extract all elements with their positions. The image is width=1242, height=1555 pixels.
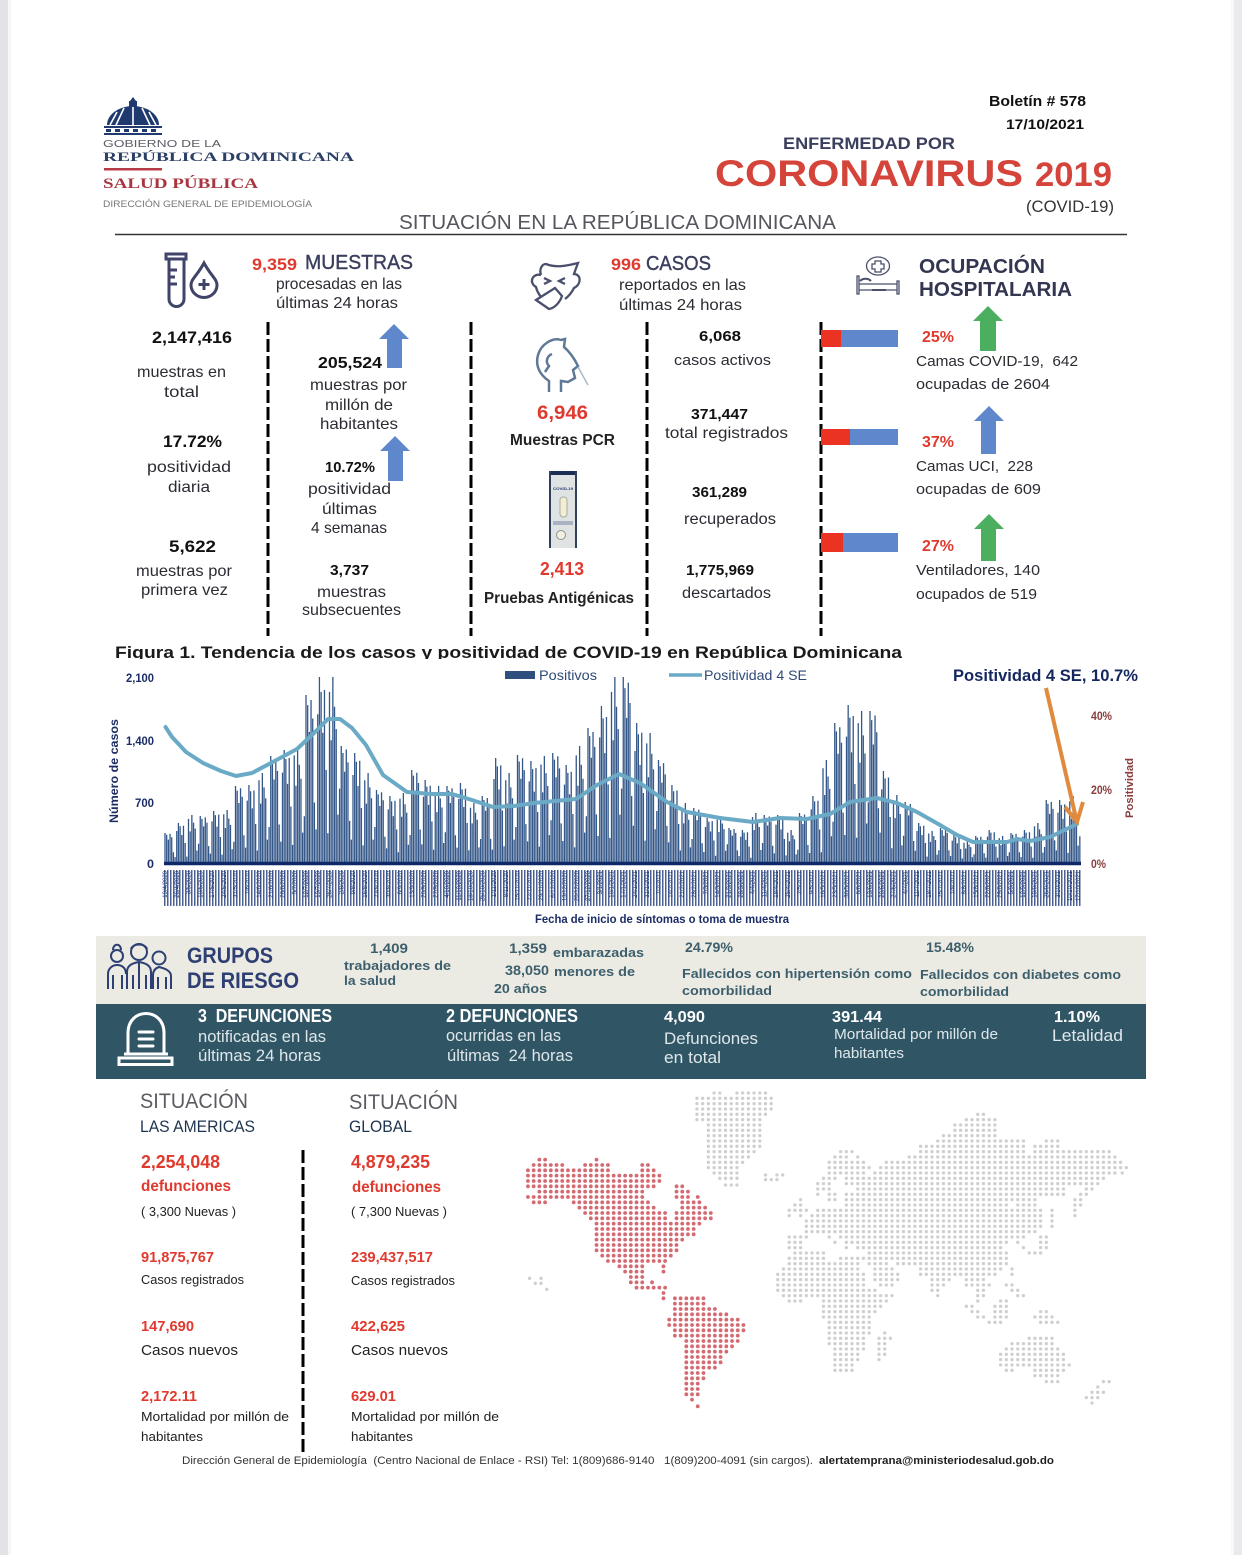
x axis: date labels: 21/3/2021 [727,870,733,898]
heading: 9,359 muestras: procesadas en las [276,276,402,293]
stat: muestras por primera vez: 5,622 [169,537,216,556]
stat: muestras subsecuentes: 3,737 [330,563,369,579]
stat: casos registrados: Casos registrados [141,1272,244,1287]
stat: mortalidad: Mortalidad por millón de [351,1409,499,1424]
heading: 9,359 muestras: MUESTRAS [305,252,413,274]
stat: camas UCI: 37% [922,434,954,451]
heading: HOSPITALARIA [919,279,1072,301]
stat: muestras por primera vez [136,537,233,599]
heading [349,1091,458,1136]
stat: casos nuevos: 422,625 [351,1318,405,1335]
footer contact line: alertatemprana@ministeriodesalud.gob.do [819,1455,1054,1467]
stat: defunciones: 4,879,235 [351,1152,430,1172]
stat: positividad últimas 4 semanas: últimas [322,501,377,518]
heading: GRUPOS [187,943,273,968]
x axis: date labels: 21/6/2020 [269,870,275,898]
y axis: number of cases: 2,100 [126,673,154,685]
stat: defunciones [351,1152,447,1219]
stat: 2 defunciones ocurridas [446,1006,578,1065]
footer contact line: Dirección General de Epidemiología (Centro Nacional de Enlace - RSI) Tel: 1(809)686-9140 1(809)200-4091 (sin cargos). [182,1455,813,1467]
y axis: positivity: 0% [1091,859,1106,871]
logo: Gobierno de la República Dominicana, Salud Pública: REPÚBLICA DOMINICANA [103,149,355,164]
legend: Positividad 4 SE [704,667,807,683]
stat: muestras por millón de habitantes: 205,524 [318,355,382,372]
x axis: date labels: 13/9/2020 [410,870,416,898]
x axis: date labels: 16/5/2021 [821,870,827,898]
panel: casos [532,253,788,602]
x axis: date labels: 4/4/2021 [750,870,756,894]
stat: mortalidad por millón: habitantes [834,1045,904,1062]
stat: camas COVID-19: 25% [922,329,954,346]
heading [140,1090,255,1136]
arrow: up green [973,306,1003,351]
subtitle with rule: SITUACIÓN EN LA REPÚBLICA DOMINICANA [399,211,837,234]
x axis: date labels: 12/7/2020 [304,870,310,898]
stat: recuperados: 361,289 [692,484,747,501]
heading: 996 casos: CASOS [646,253,711,275]
stat: casos nuevos: Casos nuevos [351,1342,448,1359]
x axis: date labels: 7/6/2020 [245,870,251,894]
stat: casos activos: 6,068 [699,328,741,345]
x axis: date labels: 9/5/2021 [809,870,815,894]
x axis: date labels: 28/6/2020 [280,870,286,898]
x axis: date labels: 21/2/2021 [680,870,686,898]
y axis: positivity: Positividad [1124,758,1136,818]
stat: positividad últimas 4 semanas [308,460,391,537]
x axis: date labels: 25/7/2021 [938,870,944,898]
stat: embarazadas y menores [494,940,644,996]
x axis: date labels: 26/7/2020 [328,870,334,898]
x axis: date labels: 26/4/2020 [175,870,181,898]
x axis: date labels: 11/10/2020 [457,870,463,901]
x axis: date labels: 14/6/2020 [257,870,263,898]
stat: embarazadas y menores: 1,359 [509,940,547,956]
icon: antigen test cassette [549,471,577,548]
stat: ventiladores: 27% [922,538,954,555]
stat: camas UCI [916,434,1041,498]
stat: muestras por millón de habitantes: millón de [325,397,393,414]
stat: ventiladores: ocupados de 519 [916,586,1037,603]
x axis: date labels: 15/8/2021 [974,870,980,898]
stat: defunciones [141,1152,236,1219]
x axis: date labels: 10/5/2020 [198,870,204,898]
stat: mortalidad: habitantes [141,1429,204,1444]
icon: nasal swab [537,339,588,392]
stat: recuperados [684,484,776,528]
x axis: date labels: 18/10/2020 [468,870,474,901]
title: CORONAVIRUS [715,153,1023,194]
stat: camas COVID-19: Camas COVID-19, 642 [916,353,1078,370]
x axis: date labels: 9/8/2020 [351,870,357,894]
stat: hipertensión: 24.79% [685,939,734,955]
x axis: date labels [163,870,1082,901]
stat: descartados [682,562,771,602]
x axis: date labels: 1/8/2021 [950,870,956,894]
stat: casos activos [674,328,771,369]
panel: muestras [136,252,413,636]
figure title: Figura 1. Tendencia de los casos y positividad de COVID-19 en República Dominicana [115,643,903,662]
stat: recuperados: recuperados [684,511,776,528]
heading: 9,359 muestras [252,252,413,312]
x axis: date labels: 17/10/2021 [1076,870,1082,901]
panel: PCR y antígenos: Pruebas Antigénicas [484,590,634,607]
x axis: date labels: 17/1/2021 [621,870,627,898]
logo: Gobierno de la República Dominicana, Salud Pública: SALUD PÚBLICA [103,175,259,192]
x axis: date labels: 11/4/2021 [762,870,768,897]
stat: positividad diaria: diaria [168,479,210,496]
x axis title: Fecha de inicio de síntomas o toma de muestra [535,914,790,926]
chart: cases and positivity trend [107,666,1138,926]
stat: letalidad: 1.10% [1054,1009,1100,1026]
x axis: date labels: 30/5/2021 [844,870,850,898]
footer contact line [182,1455,1054,1467]
x axis: date labels: 31/5/2020 [234,870,240,898]
x axis: date labels: 10/1/2021 [610,870,616,898]
logo: Gobierno de la República Dominicana, Salud Pública: DIRECCIÓN GENERAL DE EPIDEMIOLOGÍA [103,199,313,210]
x axis: date labels: 15/11/2020 [516,870,522,901]
arrow: up blue [380,436,410,481]
x axis: date labels: 3/5/2020 [186,870,192,894]
logo: Gobierno de la República Dominicana, Salud Pública: GOBIERNO DE LA [103,139,221,150]
x axis: date labels: 27/9/2020 [433,870,439,898]
stat: positividad diaria: positividad [147,459,231,476]
stat: casos nuevos [351,1318,448,1359]
arrow: orange to last point [1046,688,1083,822]
stat: 3 defunciones notificadas: notificadas en las [198,1027,326,1046]
heading: 996 casos: últimas 24 horas [619,297,742,314]
icon: antigen test cassette: COVID-19 [553,487,573,491]
x axis: date labels: 24/5/2020 [222,870,228,898]
x axis: date labels: 11/7/2021 [915,870,921,897]
x axis: date labels: 6/12/2020 [551,870,557,898]
x axis: date labels: 6/9/2020 [398,870,404,894]
panel: situación global [349,1091,499,1444]
x axis: date labels: 13/12/2020 [562,870,568,901]
legend: Positivos [539,667,597,683]
icon: tombstone [119,1014,172,1064]
x axis: date labels: 1/11/2020 [492,870,498,897]
y axis: number of cases: 0 [147,859,154,871]
x axis: date labels: 5/9/2021 [1009,870,1015,894]
x axis: date labels: 26/9/2021 [1044,870,1050,898]
bar: ventiladores 27% [821,533,898,552]
stat: mortalidad: Mortalidad por millón de [141,1409,289,1424]
x axis: date labels: 27/12/2020 [586,870,592,901]
bar: camas COVID-19 25% [821,330,898,347]
y axis: number of cases [107,673,154,871]
x axis: date labels: 3/10/2021 [1056,870,1062,898]
x axis: date labels: 28/2/2021 [692,870,698,898]
x axis: date labels: 27/6/2021 [892,870,898,898]
panel: PCR y antígenos: Muestras PCR [510,432,615,449]
map: rest of the world in grey [530,1093,1128,1403]
stat: muestras subsecuentes [302,563,401,619]
icon: test tube and drop [166,254,217,306]
stat: muestras subsecuentes: muestras [317,584,386,601]
x axis: date labels: 17/5/2020 [210,870,216,898]
stat: mortalidad: 2,172.11 [141,1388,197,1405]
x axis: date labels: 19/9/2021 [1032,870,1038,898]
heading: 9,359 muestras: 9,359 [252,255,297,274]
bar: camas UCI 37% [821,429,898,445]
heading: SITUACIÓN [349,1091,458,1114]
x axis: date labels: 14/3/2021 [715,870,721,898]
heading: SITUACIÓN [140,1090,248,1113]
stat: positividad últimas 4 semanas: 10.72% [325,460,375,476]
y axis: number of cases: 1,400 [126,736,154,748]
panel: defunciones [96,1004,1146,1079]
stat: muestras por millón de habitantes: muestras por [310,377,408,394]
stat: defunciones en total: en total [664,1048,721,1067]
x axis: date labels: 22/11/2020 [527,870,533,901]
panel: situación las Américas [140,1090,289,1444]
stat: casos nuevos: Casos nuevos [141,1342,238,1359]
stat: muestras en total: 2,147,416 [152,328,232,347]
stat: defunciones: 2,254,048 [141,1152,220,1172]
x axis: date labels: 10/10/2021 [1068,870,1074,901]
title: (COVID-19) [1026,197,1114,216]
x axis: date labels: 30/8/2020 [386,870,392,898]
stat: hipertensión [682,939,912,998]
arrow: up blue [974,406,1004,454]
x axis: date labels: 31/1/2021 [645,870,651,898]
stat: total registrados: total registrados [665,425,788,442]
y axis: number of cases: 700 [135,798,154,810]
stat: defunciones en total [664,1009,758,1067]
title: ENFERMEDAD POR [783,134,955,153]
x axis: date labels: 29/11/2020 [539,870,545,901]
stat: descartados: 1,775,969 [686,562,754,579]
stat: defunciones: ( 7,300 Nuevas ) [351,1204,447,1219]
stat: muestras por millón de habitantes [310,355,408,433]
stat: muestras en total: muestras en [137,364,226,381]
callout: positivity 10.7%: Positividad 4 SE, 10.7% [953,666,1138,685]
x axis: date labels: 18/7/2021 [927,870,933,898]
stat: casos registrados [351,1249,455,1288]
y axis: positivity [1091,711,1136,871]
x axis: date labels: 7/3/2021 [704,870,710,894]
stat: descartados: descartados [682,585,771,602]
x axis: date labels: 2/5/2021 [798,870,804,894]
title [715,134,1114,216]
stat: mortalidad por millón: Mortalidad por millón de [834,1026,998,1043]
heading: DE RIESGO [187,968,299,993]
stat: letalidad [1052,1009,1123,1045]
panel: ocupación hospitalaria [821,254,1078,603]
stat: casos nuevos: 147,690 [141,1318,194,1335]
stat: hipertensión: comorbilidad [682,983,772,998]
heading: LAS AMERICAS [140,1117,255,1136]
stat: mortalidad: 629.01 [351,1388,396,1405]
panel: PCR y antígenos: 2,413 [540,559,584,579]
stat: total registrados: 371,447 [691,406,748,423]
stat: defunciones en total: 4,090 [664,1009,705,1026]
x axis: date labels: 25/10/2020 [480,870,486,901]
stat: trabajadores de la salud: 1,409 [370,940,408,956]
heading [187,943,299,993]
bulletin number and date: 17/10/2021 [1006,116,1084,132]
stat: diabetes: Fallecidos con diabetes como [920,967,1121,982]
stat: embarazadas y menores: menores de [554,964,635,979]
heading: GLOBAL [349,1117,412,1136]
stat: defunciones: ( 3,300 Nuevas ) [141,1204,236,1219]
stat: casos nuevos [141,1318,238,1359]
x axis: date labels: 19/4/2020 [163,870,169,898]
stat: diabetes [920,939,1121,999]
stat: camas UCI: ocupadas de 609 [916,481,1041,498]
bulletin number and date: Boletín # 578 [989,93,1086,110]
map: the Americas in red [528,1160,745,1406]
stat: positividad diaria: 17.72% [163,432,222,451]
x axis: date labels: 8/8/2021 [962,870,968,894]
stat: 3 defunciones notificadas [198,1006,332,1065]
heading: OCUPACIÓN [919,254,1045,278]
x axis: date labels: 8/11/2020 [504,870,510,897]
stat: casos registrados: Casos registrados [351,1273,455,1288]
x axis: date labels: 4/10/2020 [445,870,451,898]
stat: 2 defunciones ocurridas: últimas 24 horas [447,1046,573,1065]
stat: casos activos: casos activos [674,352,771,369]
x axis: date labels: 20/9/2020 [422,870,428,898]
stat: 3 defunciones notificadas: últimas 24 horas [198,1046,321,1065]
stat: muestras en total [137,328,232,401]
icon: dome [104,97,162,135]
x axis: date labels: 25/4/2021 [786,870,792,898]
x axis: date labels: 13/6/2021 [868,870,874,898]
stat: 3 defunciones notificadas: 3 DEFUNCIONES [198,1006,332,1026]
x axis: date labels: 20/12/2020 [574,870,580,901]
heading: 996 casos [611,253,746,314]
stat: embarazadas y menores: 20 años [494,981,547,996]
icon: hospital bed [857,257,899,294]
y axis: number of cases: Número de casos [107,719,121,823]
x axis: date labels: 5/7/2020 [292,870,298,894]
stat: embarazadas y menores: 38,050 [505,962,549,978]
stat: muestras por primera vez: primera vez [141,582,228,599]
stat: defunciones: defunciones [141,1178,231,1195]
stat: ventiladores [916,538,1040,603]
stat: diabetes: comorbilidad [920,984,1009,999]
stat: mortalidad por millón: 391.44 [832,1009,882,1026]
stat: casos registrados [141,1249,244,1287]
stat: trabajadores de la salud [344,940,451,988]
x axis: date labels: 20/6/2021 [880,870,886,898]
logo: Gobierno de la República Dominicana, Salud Pública [103,97,355,210]
stat: defunciones: defunciones [352,1179,441,1196]
stat: ventiladores: Ventiladores, 140 [916,562,1040,579]
line: positivity 4 SE [166,719,1077,842]
stat: camas UCI: Camas UCI, 228 [916,458,1033,475]
y axis: positivity: 20% [1091,785,1112,797]
chart: dotted world map [526,1091,1128,1408]
x axis: date labels: 6/6/2021 [856,870,862,894]
stat: camas COVID-19: ocupadas de 2604 [916,376,1050,393]
icon: face with mask [532,263,580,309]
stat: muestras por millón de habitantes: habitantes [320,416,398,433]
stat: 2 defunciones ocurridas: 2 DEFUNCIONES [446,1006,578,1026]
stat: trabajadores de la salud: la salud [344,973,396,988]
heading: 9,359 muestras: últimas 24 horas [276,295,398,312]
x axis: date labels: 24/1/2021 [633,870,639,898]
stat: muestras por primera vez: muestras por [136,563,233,580]
x axis: date labels: 23/5/2021 [833,870,839,898]
x axis: date labels: 3/1/2021 [598,870,604,894]
x axis: date labels: 22/8/2021 [986,870,992,898]
panel: PCR y antígenos [484,339,634,607]
x axis: date labels: 19/7/2020 [316,870,322,898]
stat: mortalidad: habitantes [351,1429,414,1444]
stat: positividad últimas 4 semanas: positividad [308,481,391,498]
stat: 2 defunciones ocurridas: ocurridas en las [446,1026,561,1045]
heading: 996 casos: reportados en las [619,277,746,294]
stat: trabajadores de la salud: trabajadores de [344,958,451,973]
stat: embarazadas y menores: embarazadas [553,945,644,960]
bars: daily positive cases [165,677,1080,863]
stat: muestras subsecuentes: subsecuentes [302,602,401,619]
x axis: date labels: 4/7/2021 [903,870,909,894]
arrow: up green [974,514,1004,561]
panel: PCR y antígenos: 6,946 [537,403,588,424]
stat: positividad diaria [147,432,231,496]
stat: defunciones en total: Defunciones [664,1029,758,1048]
y axis: positivity: 40% [1091,711,1112,723]
stat: casos registrados: 91,875,767 [141,1249,214,1266]
x axis: date labels: 16/8/2020 [363,870,369,898]
heading: 996 casos: 996 [611,255,641,274]
legend [505,667,807,683]
stat: mortalidad por millón [832,1009,998,1062]
x axis: date labels: 28/3/2021 [739,870,745,898]
x axis: date labels: 12/9/2021 [1021,870,1027,898]
stat: mortalidad [141,1388,289,1444]
stat: total registrados [665,406,788,442]
stat: muestras en total: total [164,384,199,401]
x axis: date labels: 29/8/2021 [997,870,1003,898]
title: 2019 [1035,156,1112,194]
heading [919,254,1072,301]
panel: grupos de riesgo [96,936,1146,1004]
arrow: up blue [379,324,409,368]
stat: mortalidad [351,1388,499,1444]
stat: letalidad: Letalidad [1052,1026,1123,1045]
stat: hipertensión: Fallecidos con hipertensión como [682,966,912,981]
stat: camas COVID-19 [916,329,1078,393]
stat: diabetes: 15.48% [926,939,975,955]
icon: three people [108,944,171,989]
x axis: date labels: 14/2/2021 [668,870,674,898]
stat: positividad últimas 4 semanas: 4 semanas [311,520,387,537]
x axis: date labels: 2/8/2020 [339,870,345,894]
x axis: date labels: 23/8/2020 [374,870,380,898]
x axis: date labels: 7/2/2021 [656,870,662,894]
x axis: date labels: 18/4/2021 [774,870,780,898]
stat: casos registrados: 239,437,517 [351,1249,433,1266]
bulletin number and date [989,93,1086,132]
